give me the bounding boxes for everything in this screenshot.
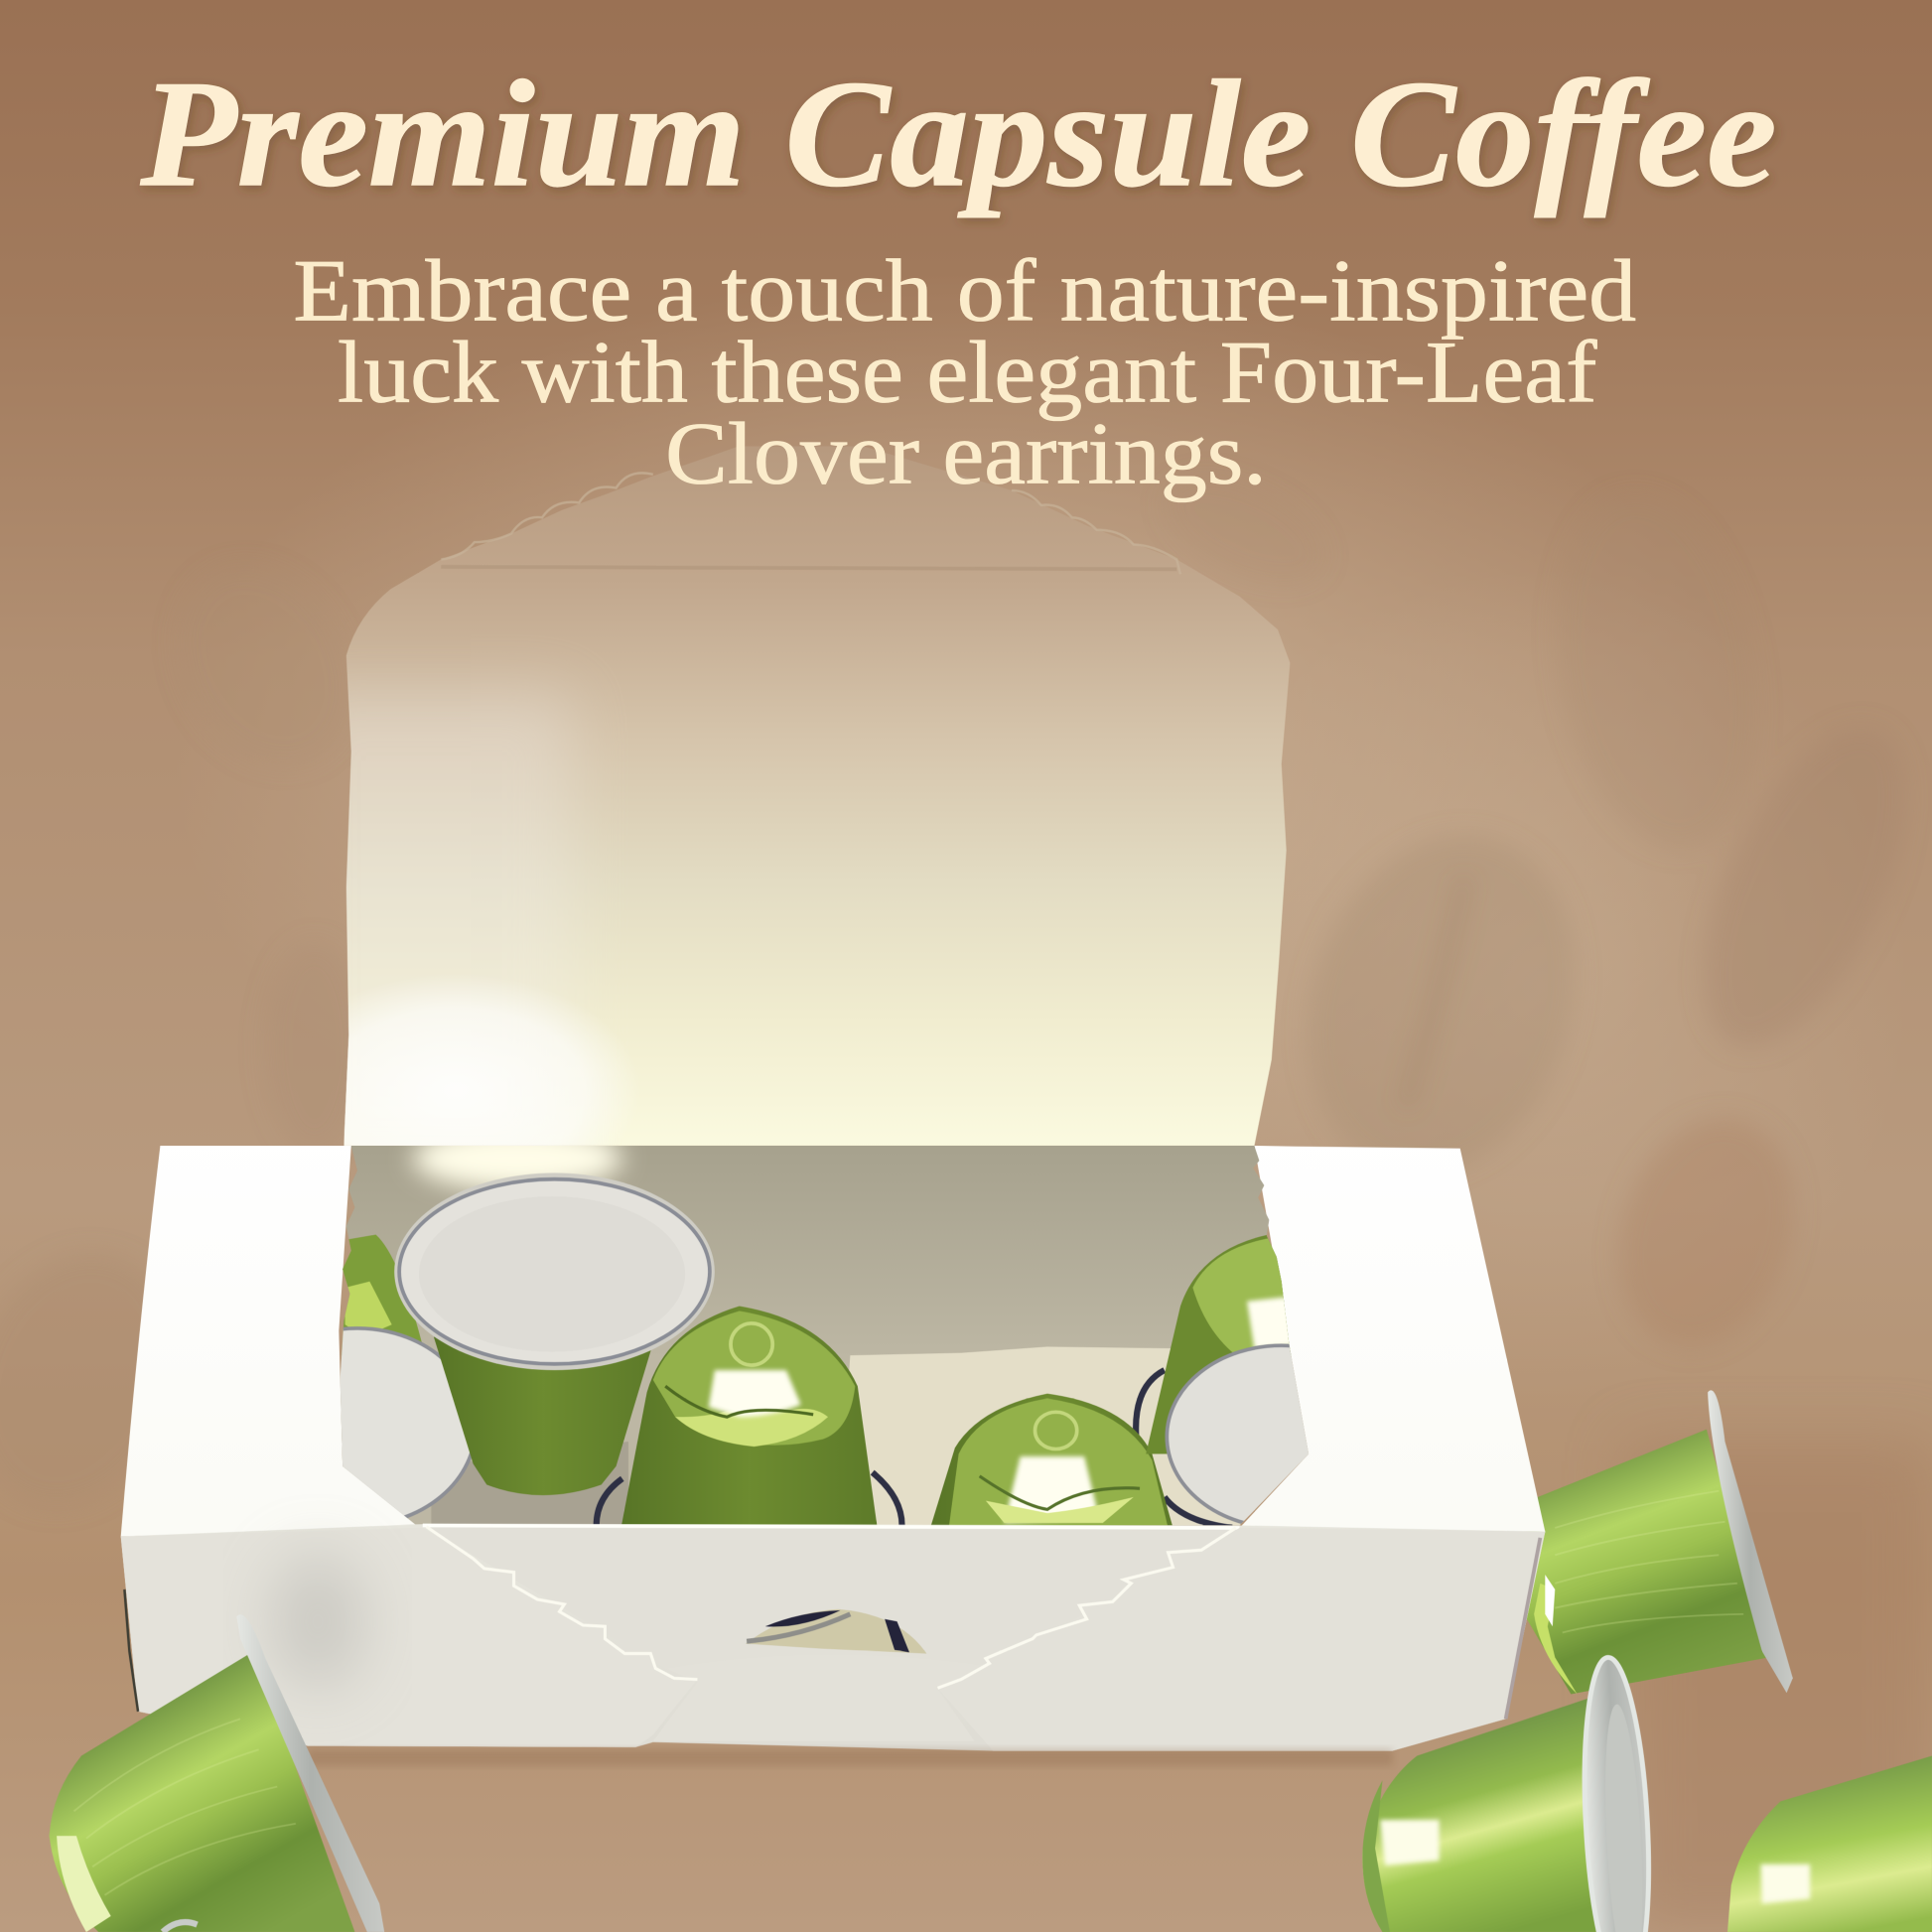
dark capsule rims	[597, 1370, 1232, 1528]
small capsule rim at bottom edge	[163, 1922, 198, 1932]
subtitle	[293, 242, 1636, 502]
capsule: upper right fallen, behind box	[1509, 1390, 1793, 1694]
box bottom tab	[653, 1654, 990, 1741]
capsule: right dome	[930, 1394, 1173, 1528]
open box	[121, 431, 1545, 1751]
subtitle: Clover earrings.	[665, 404, 1267, 502]
box centre panel	[423, 1525, 1240, 1668]
capsule: upper right	[1146, 1232, 1307, 1453]
box lid flap	[344, 447, 1291, 1146]
capsule: large standing with silver lid	[394, 1173, 715, 1495]
left front flap	[121, 1527, 697, 1747]
box top surface	[121, 1146, 1545, 1537]
capsule: bottom right fallen	[1727, 1756, 1932, 1932]
subtitle: Embrace a touch of nature-inspired	[293, 242, 1636, 341]
decorative coffee beans	[0, 455, 1932, 1535]
capsule: centre dome	[621, 1307, 878, 1528]
right front flap	[937, 1528, 1545, 1751]
capsule: silver lid right	[1165, 1343, 1309, 1524]
hole showing capsules	[746, 1609, 926, 1654]
box front panel	[121, 1524, 1545, 1751]
box interior	[340, 1146, 1309, 1525]
capsule: bottom left	[50, 1614, 384, 1932]
box left edge shadow	[124, 1589, 138, 1712]
title: Premium Capsule Coffee	[139, 50, 1777, 218]
capsule: small left green	[342, 1235, 422, 1355]
capsule: bottom centre fallen	[1362, 1656, 1656, 1932]
subtitle: luck with these elegant Four-Leaf	[338, 324, 1597, 422]
lid scalloped edge	[441, 473, 1180, 574]
capsule: silver lid left	[340, 1326, 472, 1519]
box bottom shadow	[308, 1749, 1392, 1765]
